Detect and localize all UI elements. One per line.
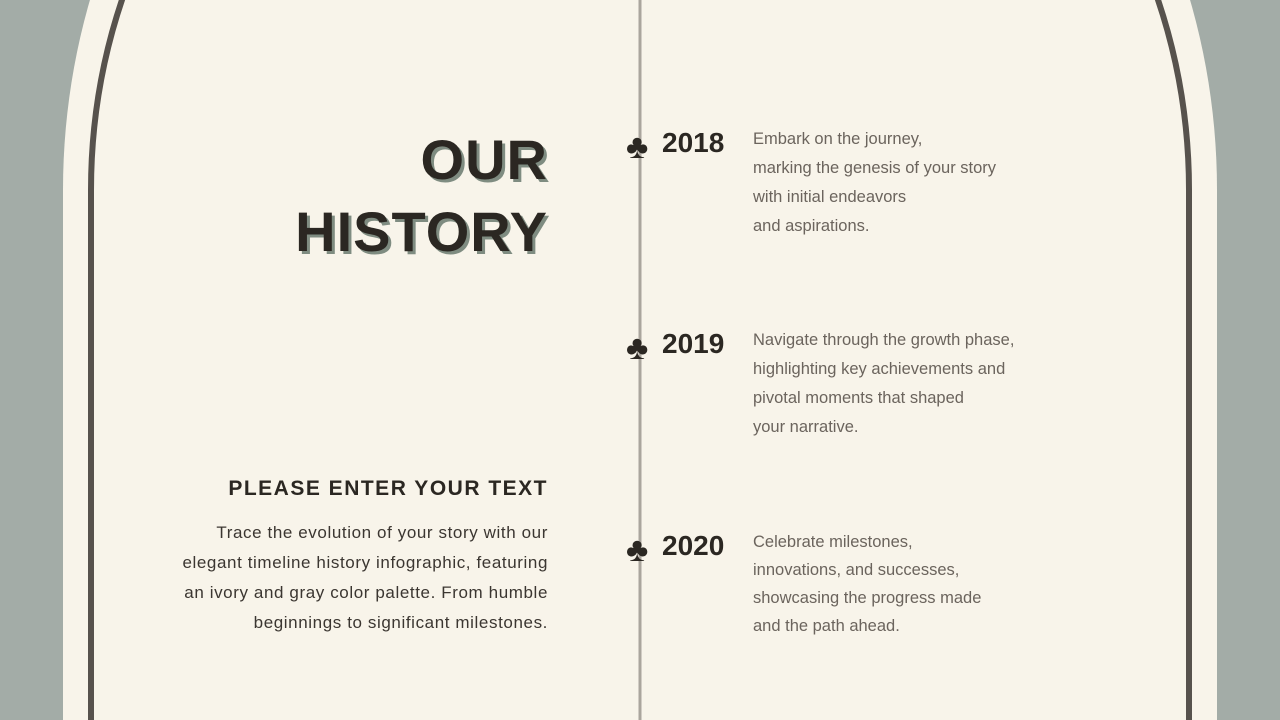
intro paragraph xyxy=(182,523,548,632)
description 2019: highlighting key achievements and xyxy=(753,360,1005,378)
description 2020 xyxy=(753,533,981,635)
intro paragraph: an ivory and gray color palette. From humble xyxy=(184,583,548,602)
icon: club: ♣ xyxy=(626,329,648,367)
milestone 2020 xyxy=(626,530,981,635)
year 2018: 2018 xyxy=(662,127,724,158)
milestone 2018 xyxy=(626,127,996,235)
description 2018 xyxy=(753,130,996,235)
description 2020: Celebrate milestones, xyxy=(753,533,913,551)
intro paragraph: Trace the evolution of your story with our xyxy=(216,523,548,542)
description 2019: your narrative. xyxy=(753,418,858,436)
description 2020: and the path ahead. xyxy=(753,617,900,635)
intro paragraph: elegant timeline history infographic, featuring xyxy=(182,553,548,572)
description 2019 xyxy=(753,331,1014,436)
description 2018: marking the genesis of your story xyxy=(753,159,996,177)
description 2018: and aspirations. xyxy=(753,217,870,235)
icon: club: ♣ xyxy=(626,128,648,166)
year 2020: 2020 xyxy=(662,530,724,561)
year 2019: 2019 xyxy=(662,328,724,359)
description 2018: Embark on the journey, xyxy=(753,130,922,148)
description 2020: innovations, and successes, xyxy=(753,561,959,579)
intro paragraph: beginnings to significant milestones. xyxy=(254,613,548,632)
description 2019: pivotal moments that shaped xyxy=(753,389,964,407)
title: HISTORY xyxy=(295,200,548,263)
description 2020: showcasing the progress made xyxy=(753,589,981,607)
title: OUR xyxy=(421,128,548,191)
title xyxy=(295,128,549,263)
icon: club: ♣ xyxy=(626,531,648,569)
subheading: PLEASE ENTER YOUR TEXT xyxy=(228,477,548,500)
description 2018: with initial endeavors xyxy=(753,188,906,206)
description 2019: Navigate through the growth phase, xyxy=(753,331,1014,349)
milestone 2019 xyxy=(626,328,1014,436)
